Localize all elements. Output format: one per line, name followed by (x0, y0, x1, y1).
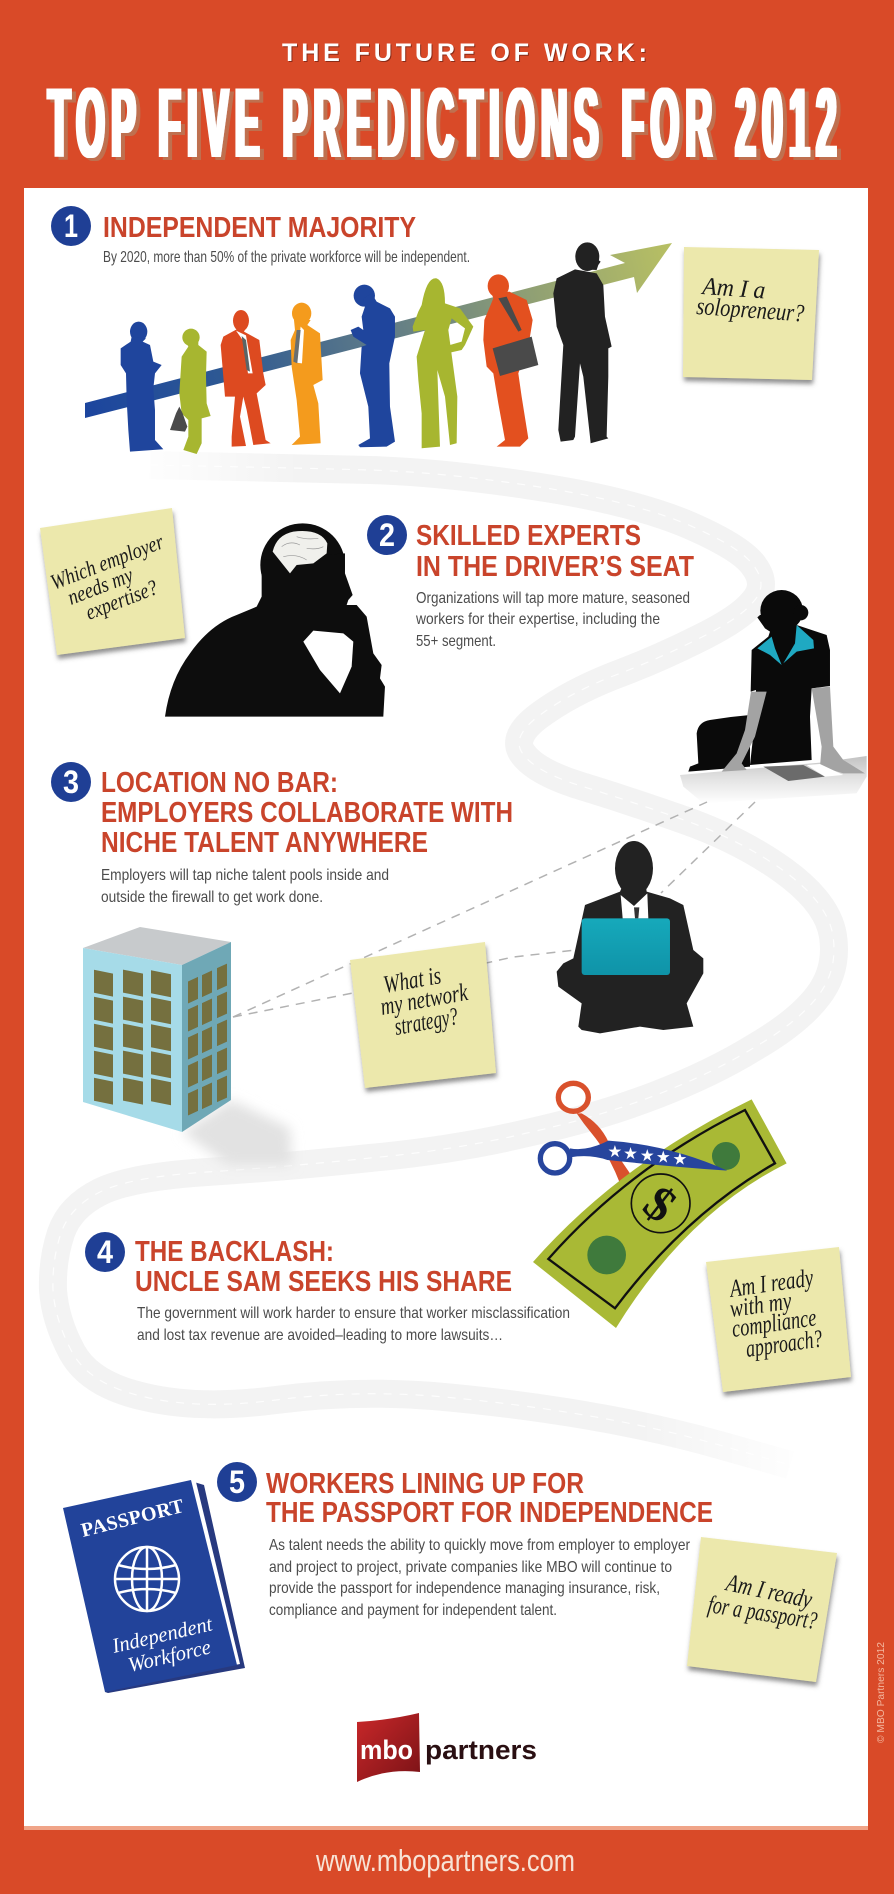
body 5: compliance and payment for independent talent. (269, 1602, 557, 1619)
website footer: www.mbopartners.com (315, 1843, 575, 1878)
sticky note 5 (687, 1537, 837, 1682)
body 3 (101, 867, 389, 906)
body 4: and lost tax revenue are avoided–leading to more lawsuits… (137, 1327, 503, 1344)
scissors and dollar bill (533, 1083, 787, 1328)
number badge 4: 4 (97, 1234, 113, 1270)
body 5: provide the passport for independence managing insurance, risk, (269, 1580, 660, 1597)
section 3: location no bar (51, 762, 755, 1165)
heading 3: LOCATION NO BAR: (101, 767, 338, 799)
heading 5 (266, 1468, 713, 1529)
sticky note 4: with my (728, 1287, 794, 1323)
passport: Independent (109, 1611, 216, 1658)
MBO Partners logo: partners (425, 1735, 537, 1765)
MBO Partners logo: mbo (360, 1735, 413, 1765)
heading 4 (135, 1236, 512, 1298)
body 3: outside the firewall to get work done. (101, 889, 323, 906)
office building (83, 927, 292, 1165)
sticky note 3: What is (381, 962, 443, 999)
heading 3: NICHE TALENT ANYWHERE (101, 827, 428, 859)
subtitle: THE FUTURE OF WORK: (282, 39, 647, 67)
MBO Partners logo (357, 1713, 537, 1782)
number badge 4 (85, 1232, 125, 1272)
sticky note 4: approach? (744, 1325, 824, 1363)
thinking man with brain (165, 523, 385, 717)
body 2: workers for their expertise, including the (415, 611, 660, 628)
body 2: Organizations will tap more mature, seasoned (416, 590, 690, 607)
heading 4: UNCLE SAM SEEKS HIS SHARE (135, 1266, 512, 1298)
header (48, 39, 843, 178)
copyright: © MBO Partners 2012 (876, 1642, 887, 1743)
sticky note 4 (706, 1247, 851, 1392)
sticky note 3: strategy? (392, 1003, 460, 1041)
body 5: As talent needs the ability to quickly move from employer to employer (269, 1537, 691, 1554)
number badge 5: 5 (229, 1464, 245, 1500)
section 1: independent majority (51, 206, 819, 454)
winding road (53, 445, 834, 1485)
heading 3 (101, 767, 513, 859)
number badge 1: 1 (64, 208, 78, 244)
sticky note 2: Which employer (47, 529, 167, 595)
sticky note 3: my network (378, 979, 470, 1021)
sticky note 5: Am I ready (722, 1569, 815, 1614)
sticky note 1 (683, 247, 819, 380)
number badge 3 (51, 762, 91, 802)
scissors and dollar bill: ★ (623, 1144, 638, 1163)
heading 1: INDEPENDENT MAJORITY (103, 212, 416, 244)
sticky note 2 (40, 508, 185, 655)
sticky note 5: for a passport? (706, 1591, 819, 1635)
heading 3: EMPLOYERS COLLABORATE WITH (101, 797, 513, 829)
workers silhouettes (121, 242, 612, 454)
body 2: 55+ segment. (416, 633, 496, 650)
sticky note 1: solopreneur? (696, 293, 806, 328)
sticky note 1: Am I a (700, 273, 766, 304)
dashed connection lines (233, 802, 755, 1017)
sticky note 2: needs my (64, 562, 136, 610)
number badge 3: 3 (63, 764, 79, 800)
passport (63, 1480, 245, 1693)
sticky note 4: compliance (730, 1304, 818, 1343)
scissors and dollar bill: ★ (673, 1149, 688, 1168)
number badge 2 (367, 515, 407, 555)
section 4: the backlash (85, 1083, 851, 1392)
passport: PASSPORT (79, 1495, 187, 1542)
body 5 (269, 1537, 691, 1619)
scissors and dollar bill: ★ (656, 1148, 671, 1167)
heading 4: THE BACKLASH: (135, 1236, 334, 1268)
passport: Workforce (126, 1635, 213, 1677)
number badge 2: 2 (379, 517, 395, 553)
scissors and dollar bill: ★ (640, 1146, 655, 1165)
heading 5: WORKERS LINING UP FOR (266, 1468, 584, 1500)
section 2: skilled experts (40, 508, 867, 803)
section 5: passport (63, 1462, 837, 1693)
scissors and dollar bill: $ (633, 1175, 687, 1233)
body 2 (415, 590, 690, 650)
body 3: Employers will tap niche talent pools inside and (101, 867, 389, 884)
heading 2 (416, 520, 694, 583)
seated man with laptop (557, 841, 703, 1033)
body 4 (137, 1305, 570, 1344)
sticky note 3 (350, 942, 496, 1088)
scissors and dollar bill: ★ (608, 1142, 623, 1161)
rising arrow (85, 243, 672, 418)
body 5: and project to project, private companies like MBO will continue to (269, 1559, 672, 1576)
number badge 1 (51, 206, 91, 246)
heading 2: SKILLED EXPERTS (416, 520, 641, 552)
heading 5: THE PASSPORT FOR INDEPENDENCE (266, 1497, 713, 1529)
body 4: The government will work harder to ensure that worker misclassification (137, 1305, 570, 1322)
woman at desk (680, 590, 867, 803)
sticky note 2: expertise? (82, 574, 161, 625)
heading 2: IN THE DRIVER’S SEAT (416, 551, 694, 583)
sticky note 4: Am I ready (727, 1264, 816, 1303)
number badge 5 (217, 1462, 257, 1502)
body 1: By 2020, more than 50% of the private workforce will be independent. (103, 249, 470, 266)
